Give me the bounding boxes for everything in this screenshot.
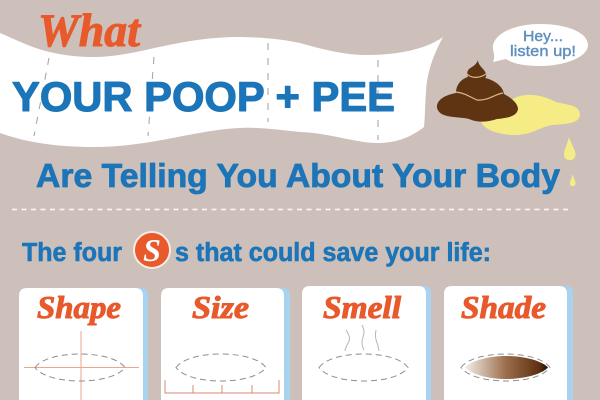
panel: shade [444, 286, 573, 400]
subtitle: Are Telling You About Your Body [36, 157, 561, 194]
icon: S badge [134, 232, 170, 268]
panel: smell: Smell [323, 289, 401, 325]
toilet paper banner [0, 33, 443, 147]
panel: size [161, 288, 290, 400]
panel: shape [19, 288, 148, 400]
panel: shape: Shape [37, 289, 121, 325]
title: What: What [38, 5, 142, 57]
heading: the four S [22, 232, 491, 268]
panel: smell [302, 286, 431, 400]
panel: shade: Shade [461, 289, 546, 325]
icon: pee puddle and drips [481, 95, 580, 186]
panel: size: Size [192, 289, 249, 325]
speech bubble [493, 24, 588, 66]
speech bubble: Hey... [523, 29, 563, 45]
heading: the four S: s that could save your life: [175, 239, 491, 267]
icon: S badge: S [143, 232, 161, 268]
heading: the four S: The four [22, 239, 122, 267]
speech bubble: listen up! [510, 44, 576, 60]
title: your poop + pee: YOUR POOP + PEE [12, 73, 395, 120]
icon: poop pile [437, 60, 518, 122]
dashed divider [12, 208, 572, 210]
